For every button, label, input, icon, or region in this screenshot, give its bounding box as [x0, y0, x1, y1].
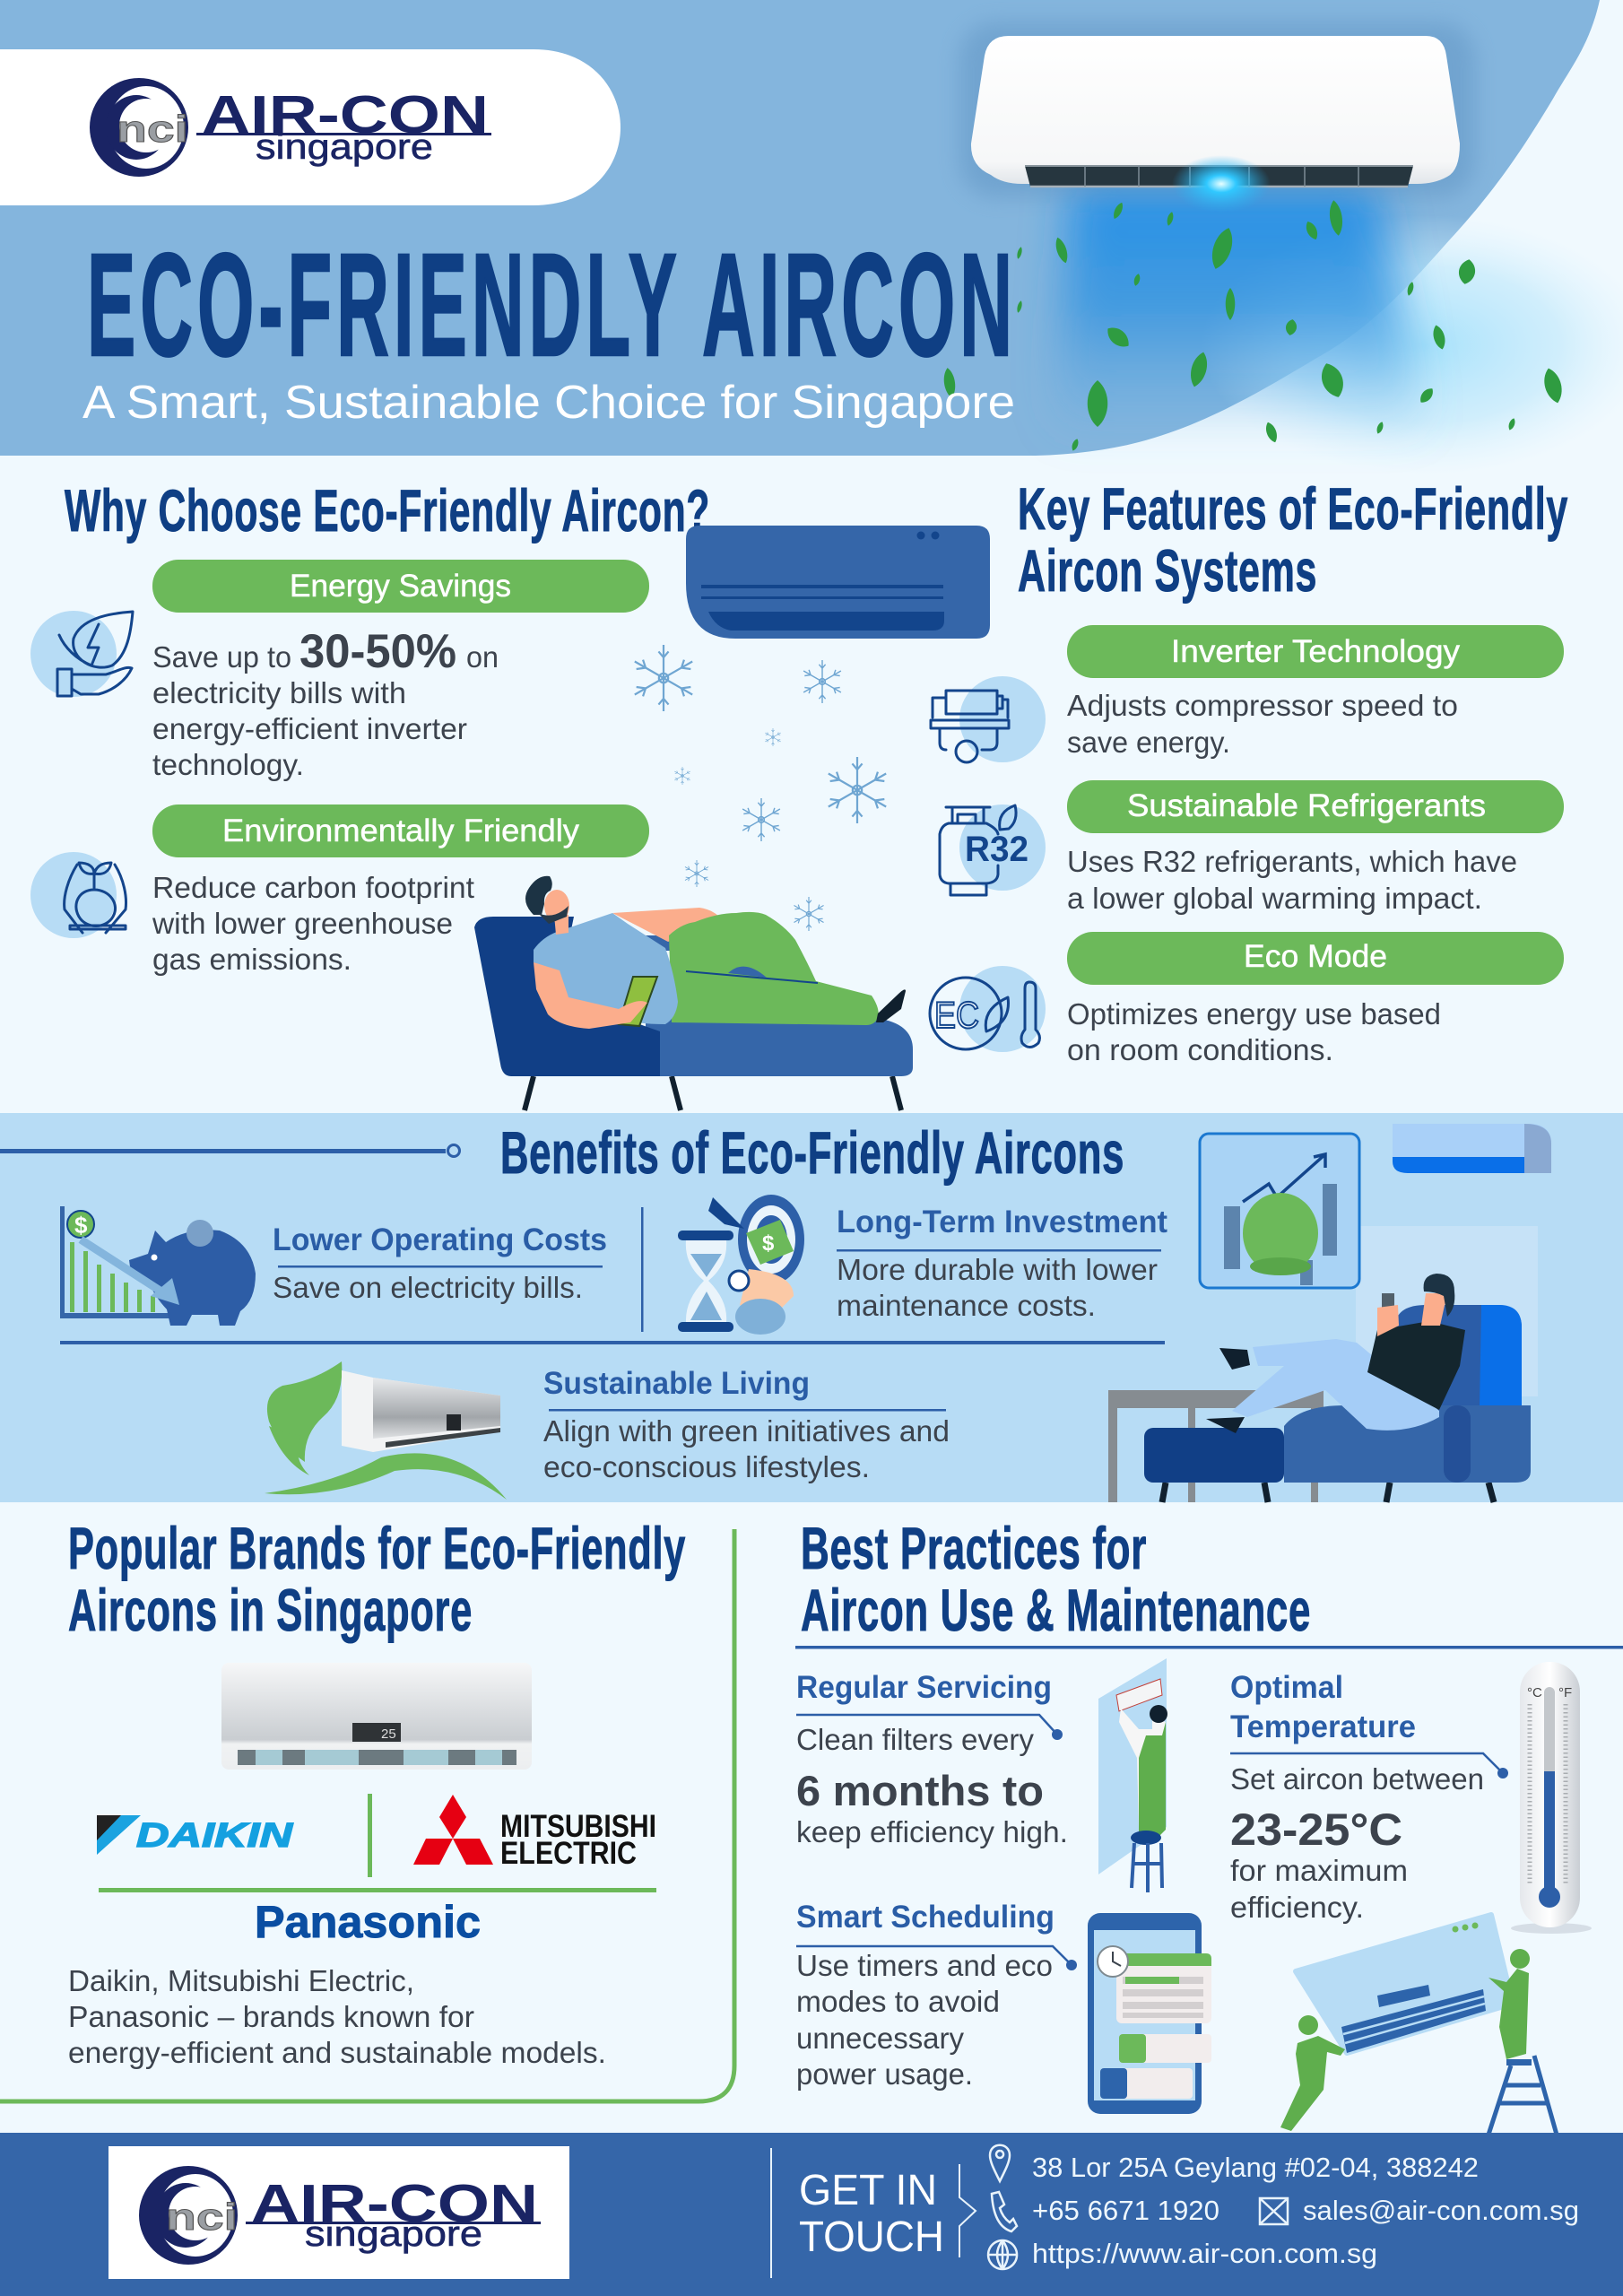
text: eco mode: Optimizes energy use based [1067, 997, 1441, 1031]
footer logo box [108, 2146, 569, 2279]
brands paragraph: Daikin, Mitsubishi Electric, [68, 1964, 414, 1997]
pill: environmentally friendly: Environmentally Friendly [222, 813, 580, 848]
bookshelf [1356, 1226, 1538, 1396]
text: sustainable refrigerants [1067, 845, 1517, 915]
logo: singapore wordmark: singapore [256, 127, 433, 167]
footer divider [770, 2148, 772, 2278]
pill: eco mode: Eco Mode [1244, 939, 1387, 974]
website: https://www.air-con.com.sg [1032, 2238, 1377, 2269]
vertical divider [368, 1794, 372, 1877]
icon: silver aircon with green leaf [265, 1361, 507, 1500]
panel: best practices [795, 1515, 1623, 2135]
indoor unit illustration [686, 526, 990, 639]
text: inverter technology: Adjusts compressor speed to [1067, 689, 1458, 722]
regular servicing: Clean filters every [796, 1723, 1034, 1756]
brands paragraph [68, 1964, 606, 2069]
text: sustainable refrigerants: Uses R32 refrigerants, which have [1067, 845, 1517, 878]
snowflakes [635, 645, 886, 931]
smart scheduling: power usage. [796, 2057, 973, 2091]
illustration: thermometer [1511, 1662, 1592, 1934]
panel: popular brands [0, 1515, 734, 2101]
text: sustainable refrigerants: a lower global warming impact. [1067, 882, 1482, 915]
text: lower operating costs: Lower Operating Costs [273, 1222, 607, 1257]
table [1108, 1390, 1324, 1502]
address: 38 Lor 25A Geylang #02-04, 388242 [1032, 2152, 1479, 2183]
pill: eco mode [1067, 932, 1564, 985]
smart scheduling: Smart Scheduling [796, 1900, 1055, 1935]
text: energy savings: 30-50% [299, 625, 456, 678]
optimal temperature: for maximum [1230, 1854, 1408, 1887]
aircon photo: 25 [381, 1726, 396, 1742]
text: environmentally friendly: with lower greenhouse [152, 907, 453, 940]
illustration: technician on stool [1098, 1658, 1167, 1892]
icon: eco thermometer: EC [934, 994, 979, 1036]
icon: inverter compressor [931, 676, 1046, 762]
logo: Mitsubishi Electric [413, 1795, 656, 1871]
icon: leaf and hand [30, 611, 133, 697]
icon: plant and globe in hands [30, 852, 126, 938]
panel: benefits band [0, 1113, 1623, 1502]
optimal temperature: Temperature [1230, 1709, 1416, 1744]
cold glow on the right of the header [1202, 215, 1623, 475]
text: sustainable living [543, 1366, 950, 1483]
text: energy savings: electricity bills with [152, 676, 406, 709]
icon: eco thermometer [930, 966, 1046, 1052]
text: long-term investment [837, 1205, 1167, 1322]
chair [1144, 1305, 1531, 1502]
optimal temperature [1230, 1670, 1508, 1924]
icon: hourglass investment target: $ [762, 1231, 775, 1256]
pill: energy savings [152, 560, 649, 613]
text: sustainable living: Align with green initiatives and [543, 1414, 950, 1448]
footer logo: swirl mark [139, 2166, 238, 2265]
text: sustainable living: Sustainable Living [543, 1366, 810, 1401]
logo: Mitsubishi Electric: ELECTRIC [500, 1836, 637, 1871]
aircon photo [221, 1663, 532, 1770]
icon: phone [992, 2192, 1017, 2231]
unit soft shadow [959, 22, 1475, 197]
logo: swirl mark [90, 78, 188, 177]
heading rule [795, 1646, 1623, 1648]
green frame [0, 1529, 734, 2101]
logo: Panasonic: Panasonic [255, 1897, 481, 1947]
text: lower operating costs [273, 1222, 607, 1304]
icon: globe [988, 2240, 1017, 2269]
pill: inverter technology [1067, 625, 1564, 678]
air beam under the unit [1054, 184, 1426, 439]
heading: Aircons in Singapore [68, 1577, 473, 1643]
logo: AIR-CON wordmark: AIR-CON [202, 85, 489, 144]
horizontal divider [60, 1341, 1165, 1344]
heading: Popular Brands for Eco-Friendly [68, 1515, 686, 1581]
text: energy savings: energy-efficient inverter [152, 712, 467, 745]
brands paragraph: energy-efficient and sustainable models. [68, 2036, 606, 2069]
smart scheduling: Use timers and eco [796, 1949, 1053, 1982]
wall air conditioner illustration [971, 36, 1460, 213]
regular servicing: 6 months to [796, 1767, 1044, 1814]
optimal temperature: Set aircon between [1230, 1762, 1484, 1796]
heading [801, 1515, 1311, 1643]
text: long-term investment: More durable with lower [837, 1253, 1158, 1286]
icon: R32 cylinder: R32 [965, 830, 1028, 869]
illustration: thermometer: °C [1527, 1685, 1542, 1700]
icon: mail [1260, 2198, 1288, 2224]
illustration: thermometer: °F [1558, 1685, 1572, 1700]
text: energy savings [152, 625, 499, 781]
footer logo: AIR-CON wordmark: AIR-CON [251, 2174, 538, 2233]
subtitle: A Smart, Sustainable Choice for Singapore [82, 377, 1015, 429]
panel: header background [0, 0, 1600, 456]
icon: piggy bank with falling chart: $ [74, 1212, 88, 1239]
footer logo: swirl mark: nci [166, 2196, 238, 2238]
logo: Mitsubishi Electric: MITSUBISHI [500, 1809, 656, 1844]
smart scheduling: unnecessary [796, 2022, 964, 2055]
get in touch: GET IN [799, 2167, 937, 2214]
logo: Daikin: DAIKIN [136, 1817, 294, 1855]
pill: inverter technology: Inverter Technology [1171, 634, 1461, 669]
heading [68, 1515, 686, 1643]
heading: Aircon Use & Maintenance [801, 1577, 1311, 1643]
get in touch [799, 2167, 944, 2261]
pill: sustainable refrigerants: Sustainable Refrigerants [1127, 788, 1486, 823]
regular servicing [796, 1670, 1068, 1848]
pill: sustainable refrigerants [1067, 780, 1564, 833]
text: inverter technology [1067, 689, 1458, 759]
text: long-term investment: Long-Term Investment [837, 1205, 1167, 1239]
smart scheduling [796, 1900, 1077, 2091]
heading: Aircon Systems [1018, 537, 1317, 604]
illustration: man on armchair with phone [1108, 1124, 1551, 1502]
chart frame with piggy [1200, 1134, 1359, 1288]
text: long-term investment: maintenance costs. [837, 1289, 1096, 1322]
panel: why choose [30, 477, 710, 976]
optimal temperature: efficiency. [1230, 1891, 1364, 1924]
optimal temperature: Optimal [1230, 1670, 1343, 1705]
pill: environmentally friendly [152, 804, 649, 857]
heading: Benefits of Eco-Friendly Aircons [500, 1119, 1124, 1186]
heading: Best Practices for [801, 1515, 1147, 1581]
text: energy savings: technology. [152, 748, 304, 781]
falling green leaves [942, 199, 1566, 452]
horizontal divider [99, 1888, 656, 1892]
panel: footer [0, 2133, 1623, 2296]
small wall unit [1393, 1124, 1551, 1173]
optimal temperature: 23-25°C [1230, 1805, 1402, 1855]
panel: key features [930, 475, 1568, 1066]
email: sales@air-con.com.sg [1303, 2195, 1579, 2226]
brands paragraph: Panasonic – brands known for [68, 2000, 474, 2033]
icon: hourglass investment target [678, 1195, 804, 1335]
text: environmentally friendly: gas emissions. [152, 943, 352, 976]
illustration: workers lifting aircon [1280, 1915, 1557, 2135]
text: eco mode: on room conditions. [1067, 1033, 1333, 1066]
icon: location pin [990, 2145, 1010, 2181]
smart scheduling: modes to avoid [796, 1985, 1000, 2018]
text: lower operating costs: Save on electricity bills. [273, 1271, 583, 1304]
regular servicing: keep efficiency high. [796, 1815, 1068, 1848]
text: energy savings: on [466, 640, 499, 674]
text: energy savings: Save up to [152, 640, 291, 674]
regular servicing: Regular Servicing [796, 1670, 1052, 1705]
man [1206, 1274, 1465, 1433]
panel: benefits content [0, 1119, 1167, 1500]
logo: Daikin [97, 1815, 294, 1855]
icon: piggy bank with falling chart [60, 1206, 256, 1326]
heading [1018, 475, 1568, 604]
text: environmentally friendly [152, 871, 474, 976]
pill: energy savings: Energy Savings [290, 569, 511, 604]
divider between benefits [641, 1207, 644, 1332]
text: eco mode [1067, 997, 1441, 1066]
text: environmentally friendly: Reduce carbon footprint [152, 871, 474, 904]
phone number: +65 6671 1920 [1032, 2195, 1219, 2226]
get in touch: TOUCH [799, 2213, 944, 2261]
footer logo: singapore wordmark: singapore [305, 2214, 482, 2254]
text: inverter technology: save energy. [1067, 726, 1230, 759]
logo pill [0, 49, 621, 205]
heading: Why Choose Eco-Friendly Aircon? [65, 477, 710, 544]
icon: R32 cylinder [940, 804, 1046, 895]
logo: swirl mark: nci [117, 108, 188, 150]
chevron arrow [959, 2164, 976, 2257]
heading rule [0, 1144, 459, 1157]
illustration: phone with schedule [1088, 1913, 1211, 2114]
illustration: man relaxing on sofa [474, 876, 913, 1110]
text: sustainable living: eco-conscious lifestyles. [543, 1450, 870, 1483]
